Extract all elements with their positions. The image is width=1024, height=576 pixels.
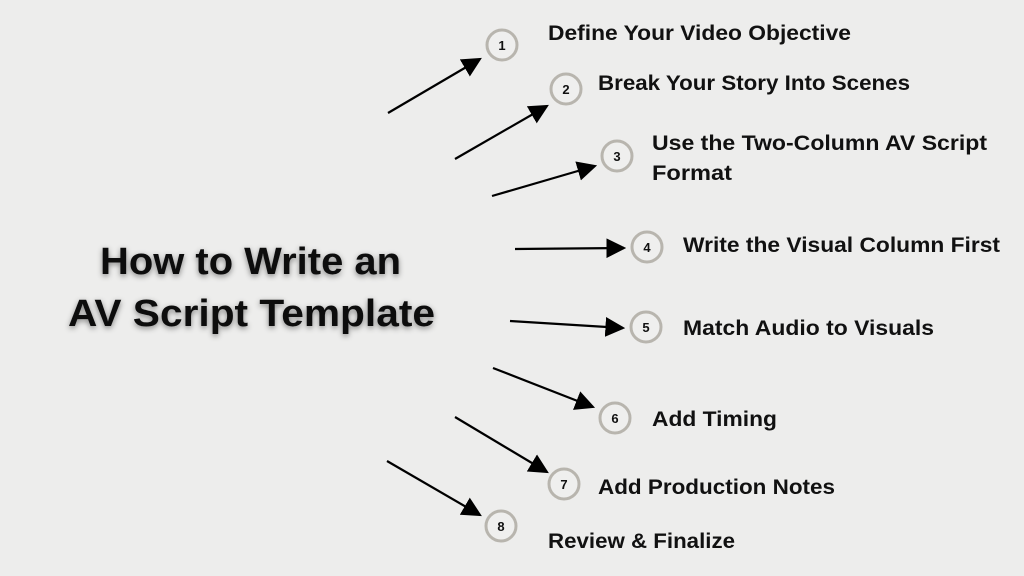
step 6 (600, 403, 777, 433)
arrow 6 (493, 368, 593, 407)
step 2: 2 (562, 82, 570, 97)
step 8 (486, 511, 735, 553)
step 2: Break Your Story Into Scenes (598, 72, 910, 95)
step 7 (549, 469, 835, 499)
step 6: 6 (611, 411, 619, 426)
step 6: Add Timing (652, 408, 777, 431)
step 8: Review & Finalize (548, 530, 735, 553)
step 7: Add Production Notes (598, 476, 835, 499)
arrow 3 (492, 166, 595, 196)
step 2 (551, 72, 910, 104)
step 1: Define Your Video Objective (548, 22, 851, 45)
arrow 1 (388, 59, 480, 113)
step 3: 3 (613, 149, 621, 164)
title: AV Script Template (68, 293, 435, 335)
step 3: Format (652, 162, 732, 185)
step 5: 5 (642, 320, 650, 335)
title (68, 241, 435, 335)
step 5 (631, 312, 934, 342)
step 3 (602, 132, 987, 185)
step 4: Write the Visual Column First (683, 234, 1000, 257)
step 1 (487, 22, 851, 60)
step 7: 7 (560, 477, 568, 492)
step 5: Match Audio to Visuals (683, 317, 934, 340)
arrow 2 (455, 106, 547, 159)
step 3: Use the Two-Column AV Script (652, 132, 987, 155)
arrow 7 (455, 417, 547, 472)
step 1: 1 (498, 38, 506, 53)
arrow 5 (510, 321, 623, 328)
step 8: 8 (497, 519, 505, 534)
arrow 8 (387, 461, 480, 515)
step 4: 4 (643, 240, 651, 255)
step 4 (632, 232, 1000, 262)
title: How to Write an (100, 241, 401, 283)
arrow 4 (515, 248, 624, 249)
